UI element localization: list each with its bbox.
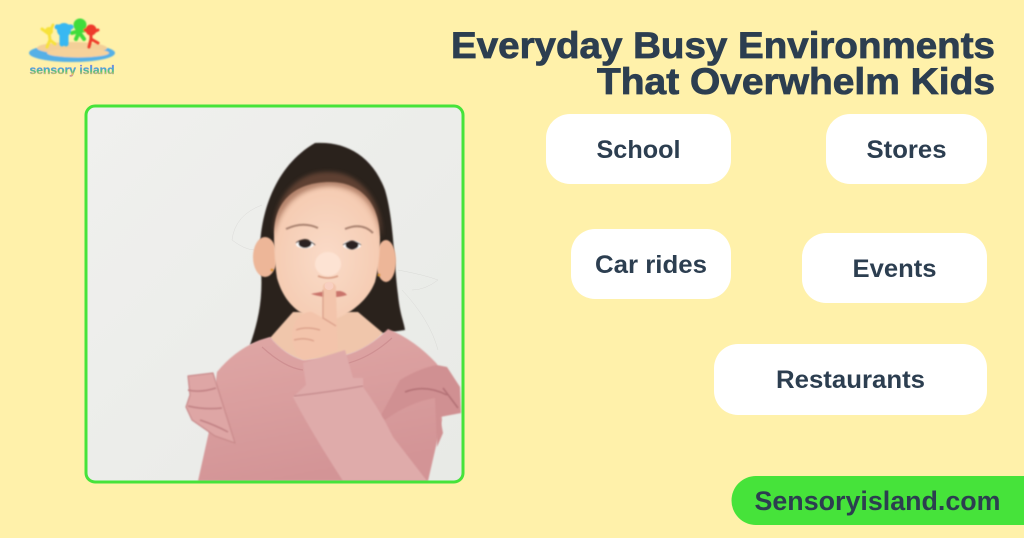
website badge [731, 476, 1024, 525]
girl: hairline shading [274, 172, 382, 238]
girl: sweater body [198, 329, 442, 481]
title: Everyday Busy Environments [451, 25, 995, 66]
photo panel: girl making a quiet gesture [86, 106, 463, 482]
pill: Car rides [571, 229, 731, 299]
photo frame [86, 106, 463, 482]
girl: face [274, 182, 380, 320]
girl: ears [253, 237, 396, 282]
girl: hair [250, 143, 405, 345]
pill: Events: Events [852, 255, 936, 283]
photo background [86, 106, 463, 482]
pill: Restaurants: Restaurants [776, 366, 925, 394]
pill: Car rides: Car rides [595, 251, 707, 279]
girl: sleeve [293, 350, 427, 481]
logo: sensory island [29, 20, 115, 77]
title [451, 25, 995, 102]
icon: island [29, 42, 115, 62]
pill: School: School [596, 136, 680, 164]
pill: Restaurants [714, 344, 987, 415]
girl: sweater collar [262, 338, 392, 370]
girl: right ruffle [380, 365, 461, 447]
girl: neck [270, 312, 383, 360]
logo wordmark: sensory island [30, 63, 114, 77]
girl: finger creases [294, 290, 336, 341]
pill: Events [802, 233, 987, 303]
icon: four children silhouettes [42, 20, 98, 47]
pill: Stores: Stores [866, 136, 946, 164]
title: That Overwhelm Kids [597, 61, 995, 102]
girl: fingertip [324, 282, 334, 290]
girl: hand and finger [306, 283, 337, 319]
pill: Stores [826, 114, 987, 184]
girl: brows, eyes, nose, mouth [286, 225, 373, 297]
girl: sleeve cuff line [294, 386, 363, 396]
girl: left ruffle [186, 373, 235, 443]
pill: School [546, 114, 731, 184]
girl: flyaway hair [232, 205, 438, 350]
website badge: Sensoryisland.com [754, 486, 1000, 516]
